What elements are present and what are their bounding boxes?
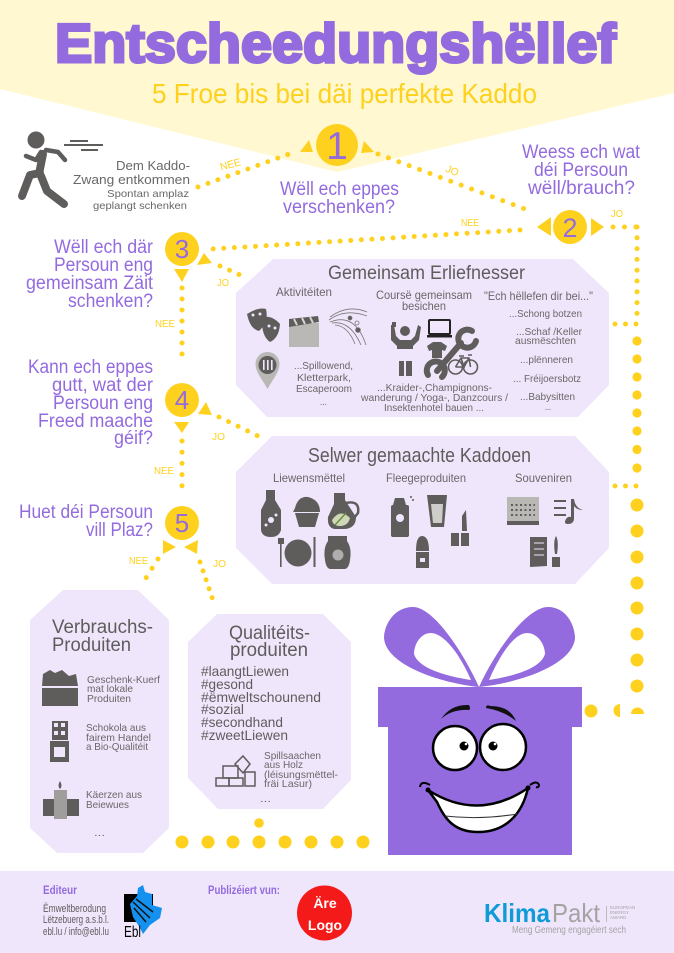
eyebrows — [441, 705, 516, 721]
heading — [229, 623, 310, 661]
icon: wrench — [427, 330, 476, 377]
question 4: géif? — [114, 428, 153, 449]
question 1: Wëll ech eppes — [280, 179, 399, 200]
question 2 — [522, 142, 641, 199]
logo: KlimaPakt: Meng Gemeng engagéiert sech — [512, 925, 626, 936]
question 4: Freed maache — [38, 411, 153, 432]
question 5 — [19, 502, 153, 541]
text: help offers: ... Fréijoersbotz — [513, 373, 581, 385]
eyes — [433, 724, 526, 770]
question 4: gutt, wat der — [52, 375, 154, 396]
step 4 — [165, 383, 212, 433]
icon: chocolate bar — [50, 721, 69, 762]
text: chocolate — [86, 722, 151, 753]
icon: jam jar — [324, 536, 351, 569]
text: courses — [360, 382, 508, 414]
flow connectors — [146, 153, 644, 848]
logo: KlimaPakt: AWARD — [610, 915, 627, 920]
flow labels: NEE — [129, 555, 148, 567]
subtitle: 5 Froe bis bei däi perfekte Kaddo — [152, 78, 537, 109]
icon: bottle — [261, 490, 281, 537]
flow labels: JO — [217, 277, 229, 289]
logo: KlimaPakt: Pakt — [552, 898, 601, 928]
logo: KlimaPakt: ENERGY — [610, 910, 629, 915]
text: escape the gift obligation: Zwang entkommen — [73, 173, 190, 187]
question 3 — [26, 237, 154, 312]
text: escape the gift obligation: Dem Kaddo- — [116, 159, 190, 173]
icon: cream tube — [427, 495, 447, 527]
column headings: besichen — [402, 299, 446, 313]
icon: wooden toys — [216, 756, 255, 786]
hashtags: #sozial — [201, 701, 244, 717]
question 3: schenken? — [68, 291, 153, 312]
text: candles — [86, 789, 142, 839]
text: escape the gift obligation: Spontan amplaz — [107, 188, 189, 200]
icon: person with arms raised — [391, 322, 421, 349]
icon: clapperboard — [289, 316, 319, 347]
hashtags: #secondhand — [201, 714, 283, 730]
icon: lipstick — [451, 510, 469, 546]
logo placeholder: Äre — [313, 895, 337, 911]
icon: t-shirt — [427, 342, 447, 358]
logo: KlimaPakt — [484, 898, 635, 936]
icon: restaurant pin — [256, 352, 280, 389]
text: toys: aus Holz — [264, 759, 303, 771]
text: chocolate: fairem Handel — [86, 732, 151, 744]
step 1: 1 — [326, 125, 348, 168]
publisher text: Lëtzebuerg a.s.b.l. — [43, 914, 109, 926]
text: escape the gift obligation: geplangt schenken — [93, 200, 187, 212]
question 4 — [28, 357, 154, 449]
box — [388, 727, 572, 855]
question 2: Weess ech wat — [522, 142, 641, 163]
published by label: Publizéiert vun: — [208, 883, 280, 897]
icon: gift basket — [42, 670, 78, 706]
text: basket: Geschenk-Kuerf — [87, 674, 160, 686]
question 5: Huet déi Persoun — [19, 502, 153, 523]
logo: KlimaPakt: Klima — [484, 898, 550, 928]
column headings: "Ech hëllefen dir bei..." — [484, 289, 593, 303]
column headings: Coursë gemeinsam — [376, 288, 472, 302]
question 3: gemeinsam Zäit — [26, 273, 154, 294]
text: activities — [294, 360, 353, 408]
text: toys: Spillsaachen — [264, 750, 321, 762]
heading — [52, 617, 153, 656]
hashtags: #zweetLiewen — [201, 727, 288, 743]
icon: running person — [22, 132, 103, 204]
text: help offers: ...Schaf /Keller — [516, 326, 582, 338]
hashtags — [201, 663, 321, 743]
bow — [384, 607, 479, 687]
column headings — [273, 471, 572, 485]
icon: deodorant — [416, 536, 429, 568]
text: help offers: ...Schong botzen — [509, 308, 582, 320]
column headings: Aktivitéiten — [276, 285, 332, 299]
text: courses: ...Kraider-,Champignons- — [377, 382, 492, 394]
text: courses: Insektenhotel bauen ... — [384, 402, 484, 414]
icon: music list — [554, 499, 583, 524]
panel: shared experiences — [236, 259, 609, 417]
question 1: verschenken? — [283, 197, 395, 218]
text: candles: Beiewues — [86, 799, 129, 811]
text: help offers: ...Babysitten — [520, 391, 575, 403]
text: activities: Escaperoom — [296, 383, 352, 395]
column headings: Fleegeproduiten — [386, 471, 466, 485]
heading: Qualitéits- — [229, 623, 310, 644]
step 2: 2 — [562, 213, 578, 243]
icon: scroll and quill — [530, 536, 560, 567]
text: toys: (léisungsmëttel- — [264, 769, 338, 781]
text: candles: Käerzen aus — [86, 789, 142, 801]
icon: cupcake — [293, 497, 320, 527]
heading: Gemeinsam Erliefnesser — [328, 263, 526, 284]
bow right — [479, 607, 575, 687]
heading: produiten — [230, 640, 308, 661]
publisher text: Ëmweltberodung — [43, 903, 106, 915]
logo: Ebl: Ebl — [124, 924, 141, 941]
icon: calendar — [507, 497, 539, 525]
question 1 — [280, 179, 399, 218]
panel: quality products — [188, 614, 351, 809]
text: escape the gift obligation — [73, 159, 190, 212]
icon: music staff — [329, 309, 367, 345]
flow labels: NEE — [154, 465, 174, 477]
question 3: Wëll ech där — [54, 237, 154, 258]
icon: oil jug — [328, 493, 358, 529]
column headings: Liewensmëttel — [273, 471, 345, 485]
step 2 — [537, 210, 604, 244]
text: basket — [87, 674, 160, 705]
hashtags: #gesond — [201, 676, 253, 692]
text: basket: mat lokale — [87, 683, 133, 695]
header background — [0, 0, 674, 172]
text: toys: fräi Lasur) — [264, 778, 312, 790]
text: activities: ... — [320, 396, 327, 408]
hashtags: #laangtLiewen — [201, 663, 289, 679]
flow labels: JO — [213, 558, 226, 570]
heading: Produiten — [52, 635, 131, 656]
logo: Ebl — [124, 885, 162, 941]
text: chocolate: a Bio-Qualitéit — [86, 741, 148, 753]
step 5: 5 — [175, 508, 189, 538]
publisher text — [43, 883, 109, 938]
logo placeholder — [297, 886, 352, 940]
question 3: Persoun eng — [54, 255, 153, 276]
question 5: vill Plaz? — [86, 520, 153, 541]
gift character — [378, 607, 582, 855]
footer — [0, 871, 674, 953]
step 1 — [300, 124, 374, 168]
flow labels — [129, 156, 623, 570]
question 4: Persoun eng — [53, 393, 153, 414]
text: help offers — [509, 308, 582, 413]
heading: Verbrauchs- — [52, 617, 153, 638]
text: help offers: ausmëschten — [515, 335, 576, 347]
icon: bicycle — [448, 355, 478, 374]
panel: consumable products — [30, 590, 169, 853]
icon: candles — [43, 781, 79, 819]
text: toys — [260, 750, 338, 805]
hashtags: #ëmweltschounend — [201, 689, 321, 705]
text: help offers: ...plënneren — [520, 354, 573, 366]
icon: spray can — [391, 496, 414, 537]
flow labels: NEE — [155, 318, 175, 330]
flow labels: JO — [444, 163, 460, 179]
icon: theatre masks — [247, 309, 280, 342]
column headings: Souveniren — [515, 471, 572, 485]
icon: plate and cutlery — [278, 537, 316, 567]
publisher text: Editeur — [43, 883, 77, 897]
icon: laptop — [427, 320, 452, 338]
logo placeholder: Logo — [308, 917, 342, 933]
text: basket: Produiten — [87, 693, 131, 705]
step 3: 3 — [175, 234, 189, 264]
panel: home-made gifts — [236, 436, 609, 584]
question 2: déi Persoun — [534, 160, 628, 181]
flow labels: NEE — [461, 217, 479, 229]
step 5 — [163, 506, 199, 554]
text: help offers: ... — [545, 401, 551, 413]
step 4: 4 — [175, 385, 189, 415]
column headings — [276, 285, 593, 313]
step 3 — [165, 232, 212, 282]
question 2: wëll/brauch? — [527, 178, 635, 199]
text: candles: ... — [94, 827, 105, 839]
flow labels: JO — [611, 208, 623, 220]
flow labels: JO — [212, 431, 225, 443]
text: activities: ...Spillowend, — [294, 360, 353, 372]
text: courses: wanderung / Yoga-, Danzcours / — [360, 392, 508, 404]
lid — [378, 687, 582, 727]
text: chocolate: Schokola aus — [86, 722, 146, 734]
title: Entscheedungshëllef — [55, 12, 617, 74]
logo: KlimaPakt: EUROPEAN — [610, 905, 635, 910]
text: activities: Kletterpark, — [297, 372, 351, 384]
mouth — [420, 782, 539, 832]
heading: Selwer gemaachte Kaddoen — [308, 445, 531, 467]
flow labels: NEE — [219, 156, 242, 173]
question 4: Kann ech eppes — [28, 357, 153, 378]
text: toys: ... — [260, 793, 271, 805]
icon: trouser legs — [399, 361, 412, 376]
publisher text: ebl.lu / info@ebl.lu — [43, 926, 109, 938]
